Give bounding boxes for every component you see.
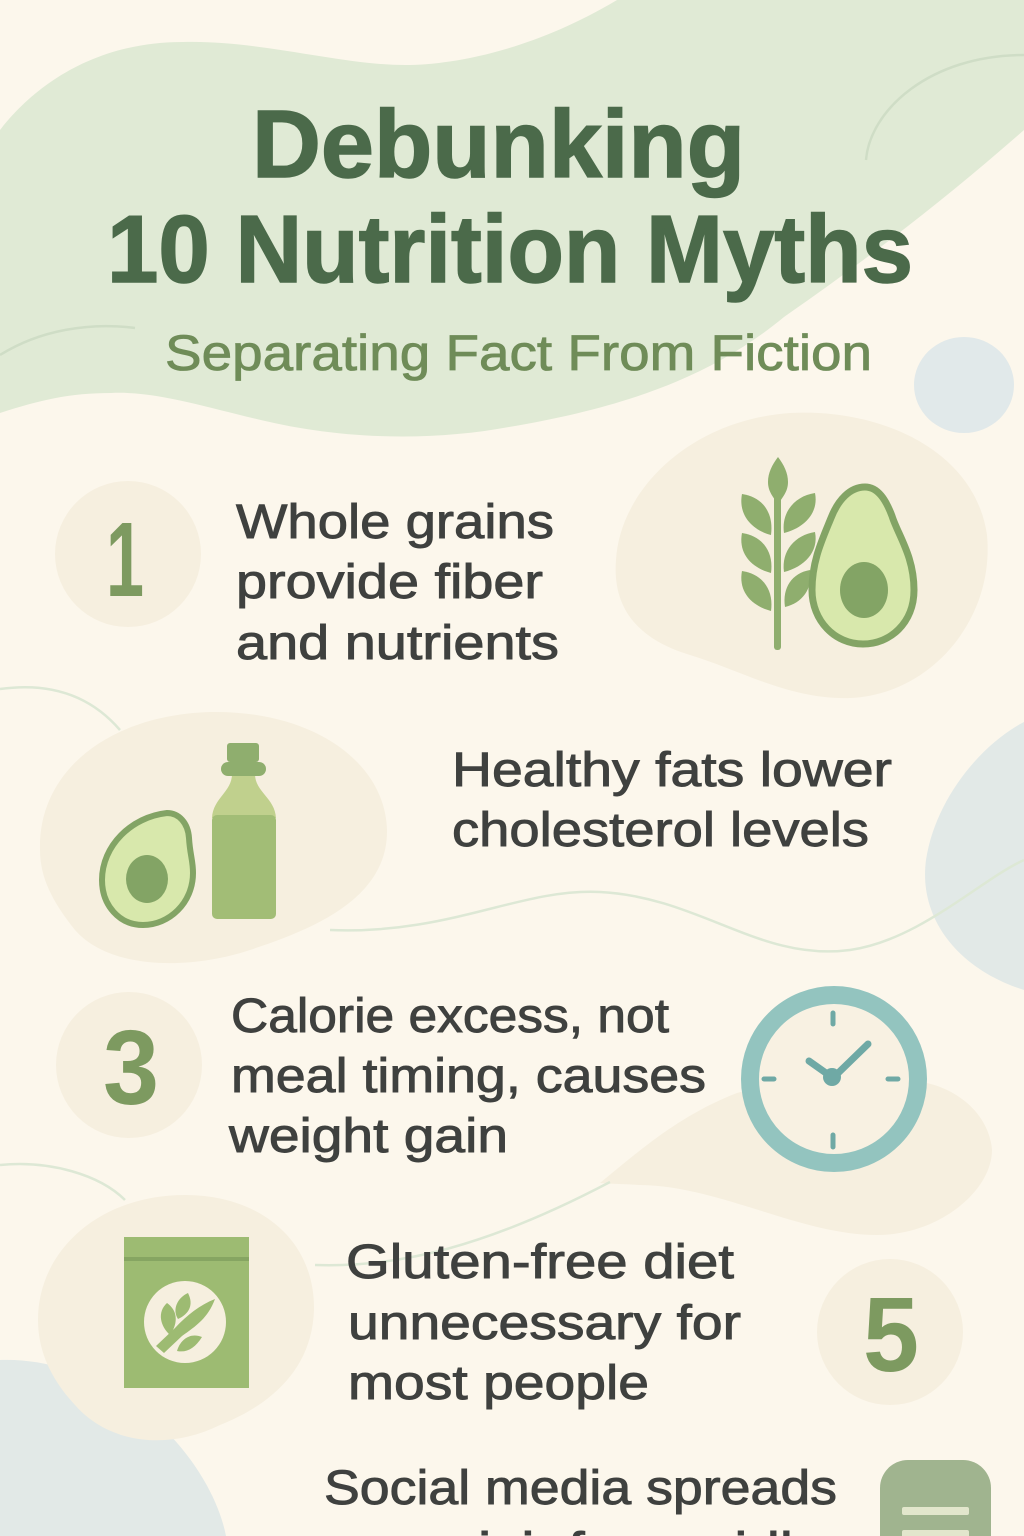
top right line xyxy=(866,55,1024,160)
myth 3 text: Calorie excess, not xyxy=(231,990,669,1043)
myth 3 text: weight gain xyxy=(228,1110,508,1163)
icon: clock xyxy=(750,995,918,1163)
myth 3 text: meal timing, causes xyxy=(231,1050,706,1103)
cream blob behind row 2 icon xyxy=(40,712,387,963)
bottom-left blue blob xyxy=(0,1360,226,1536)
icon: avocado half xyxy=(812,487,914,644)
myth 1 text: Whole grains xyxy=(236,496,554,549)
cream blob behind clock xyxy=(600,1077,992,1235)
number badge 3 xyxy=(56,992,202,1138)
icon: phone xyxy=(880,1460,991,1536)
myth 6 text xyxy=(324,1462,837,1536)
number badge 3: 3 xyxy=(103,1009,159,1127)
icon: wheat xyxy=(741,457,816,650)
myth 4 text: unnecessary for xyxy=(348,1297,741,1350)
subtitle: Separating Fact From Fiction xyxy=(165,325,872,381)
cream blob behind row 1 icon xyxy=(616,413,988,698)
myth 4 text: most people xyxy=(348,1357,649,1410)
myth 2 text xyxy=(452,744,892,857)
icon: avocado xyxy=(102,813,193,925)
myth 3 text xyxy=(228,990,706,1163)
number badge 5: 5 xyxy=(863,1276,919,1394)
header green blob xyxy=(0,0,1024,436)
icon: oil bottle xyxy=(212,743,276,919)
left line row 4 xyxy=(0,1164,125,1200)
left header line xyxy=(0,326,135,355)
title: 10 Nutrition Myths xyxy=(107,196,913,303)
myth 4 text xyxy=(346,1236,741,1410)
wave line lower xyxy=(315,1182,610,1265)
myth 2 text: cholesterol levels xyxy=(452,804,869,857)
myth 1 text: provide fiber xyxy=(236,556,543,609)
number badge 1 xyxy=(55,481,201,627)
right blue blob xyxy=(925,722,1024,990)
title xyxy=(107,91,913,303)
wave line middle xyxy=(330,860,1024,951)
myth 1 text xyxy=(236,496,559,670)
myth 6 text: Social media spreads xyxy=(324,1462,837,1515)
number badge 5 xyxy=(817,1259,963,1405)
number badge 1: 1 xyxy=(106,501,144,619)
decorative blue circle xyxy=(914,337,1014,433)
myth 1 text: and nutrients xyxy=(236,617,559,670)
myth 4 text: Gluten-free diet xyxy=(346,1236,734,1289)
left line row 2 xyxy=(0,687,120,730)
title: Debunking xyxy=(252,91,745,198)
myth 2 text: Healthy fats lower xyxy=(452,744,892,797)
cream blob behind row 4 icon xyxy=(38,1195,314,1440)
icon: gluten-free bag xyxy=(124,1237,249,1388)
